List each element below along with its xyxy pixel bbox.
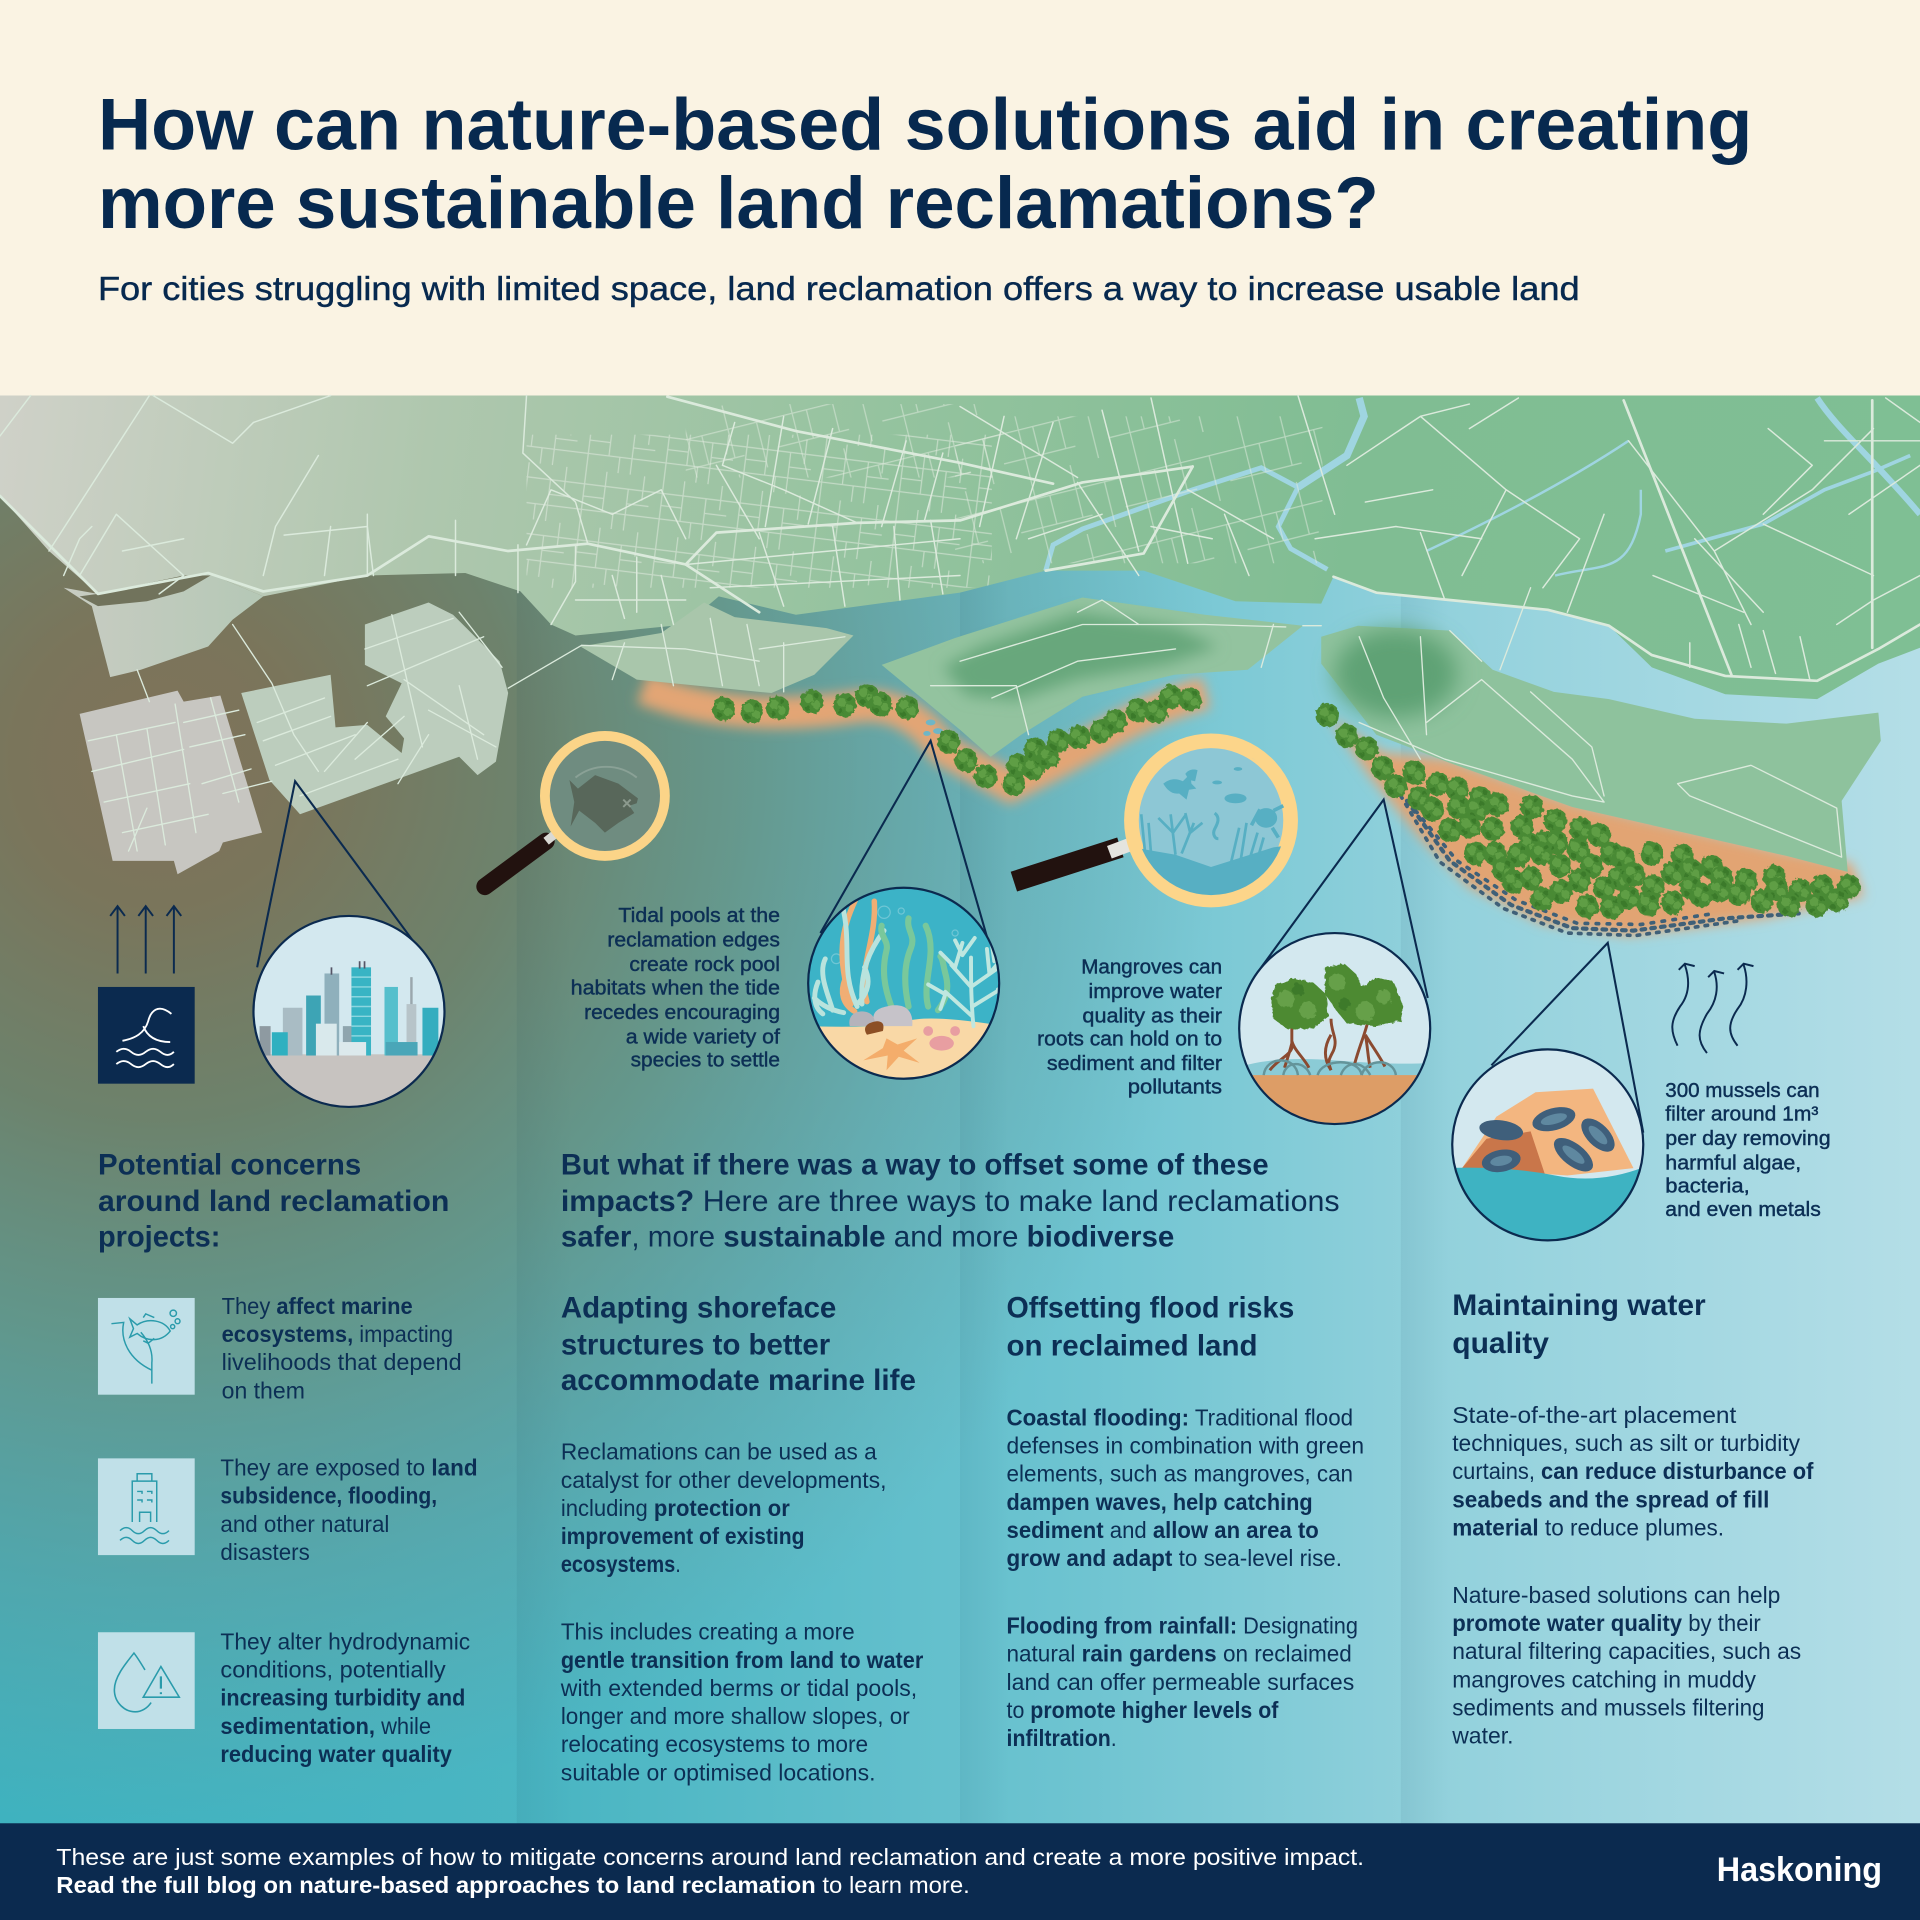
text: marine ecosystems: on them xyxy=(222,1377,305,1403)
logo: Haskoning: Haskoning xyxy=(1717,1851,1882,1889)
callout text: mussels: bacteria, xyxy=(1665,1176,1750,1198)
callout text: mangroves: sediment and filter xyxy=(1047,1053,1222,1075)
right island forest xyxy=(1335,629,1457,718)
text: catalyst xyxy=(561,1439,887,1577)
text: coastal flooding: elements, such as mangroves, can xyxy=(1007,1461,1353,1487)
text: rainfall flooding: infiltration. xyxy=(1007,1725,1117,1751)
heading: on reclaimed land xyxy=(1007,1330,1258,1363)
arrows: sea level rise xyxy=(110,906,181,973)
text: subsidence and flooding: They are exposed to land xyxy=(220,1455,478,1481)
text: catalyst: including protection or xyxy=(561,1495,790,1521)
circle: mussels xyxy=(1445,1049,1653,1249)
text: placement techniques: material to reduce plumes. xyxy=(1452,1515,1724,1541)
middle island forest xyxy=(943,612,1218,700)
text: placement techniques xyxy=(1452,1402,1814,1541)
callout text: tidal pools: species to settle xyxy=(631,1050,780,1072)
text: subsidence and flooding: disasters xyxy=(220,1539,310,1565)
heading: Offsetting flood risks xyxy=(1007,1292,1294,1325)
text: rainfall flooding: natural rain gardens on reclaimed xyxy=(1007,1641,1352,1667)
footer text xyxy=(56,1844,1364,1898)
text: catalyst: improvement of existing xyxy=(561,1523,804,1549)
icon: wave box xyxy=(98,987,195,1084)
heading: Maintaining water xyxy=(1452,1289,1706,1322)
text: natural filtering xyxy=(1451,1582,1801,1749)
text: gentle transition: This includes creating a more xyxy=(561,1619,855,1645)
callout text: mangroves: Mangroves can xyxy=(1081,956,1222,978)
callout text: mangroves: improve water xyxy=(1089,981,1222,1003)
heading: quality xyxy=(1452,1327,1549,1360)
text: natural filtering: Nature-based solutions can help xyxy=(1452,1582,1780,1608)
callout text: tidal pools: create rock pool xyxy=(629,954,780,976)
callout text: mussels: 300 mussels can xyxy=(1665,1080,1820,1102)
lagoon xyxy=(80,576,211,606)
heading: potential concerns xyxy=(98,1148,449,1254)
mangrove trees xyxy=(712,683,1861,920)
panel: water quality xyxy=(1451,1289,1814,1749)
circle: mangroves xyxy=(1237,933,1433,1136)
text: placement techniques: seabeds and the spread of fill xyxy=(1452,1486,1769,1512)
middle island xyxy=(882,598,1303,757)
heading: offset impacts: impacts? Here are three ways to make land reclamations xyxy=(561,1185,1340,1218)
text: coastal flooding: defenses in combination with green xyxy=(1007,1432,1364,1458)
text: marine ecosystems: ecosystems, impacting xyxy=(222,1321,453,1347)
text: natural filtering: water. xyxy=(1451,1723,1513,1749)
callout text: tidal pools xyxy=(571,905,780,1072)
arrows: filtered water xyxy=(1672,964,1753,1053)
callout text: tidal pools: habitats when the tide xyxy=(571,977,780,999)
text: catalyst: ecosystems. xyxy=(561,1551,681,1577)
circle: city skyline xyxy=(253,916,449,1116)
text: rainfall flooding xyxy=(1007,1612,1358,1751)
callout text: mussels: filter around 1m³ xyxy=(1665,1103,1819,1125)
port extension with lagoon xyxy=(64,573,263,677)
text: placement techniques: techniques, such as silt or turbidity xyxy=(1452,1430,1801,1456)
panel: flood risks xyxy=(1007,1292,1364,1751)
heading: potential concerns: Potential concerns xyxy=(98,1148,361,1181)
text: gentle transition: suitable or optimised locations. xyxy=(561,1759,876,1785)
sea gradient background xyxy=(0,396,1920,1828)
callout text: mussels: harmful algae, xyxy=(1665,1152,1801,1174)
text: marine ecosystems: They affect marine xyxy=(222,1293,413,1319)
heading xyxy=(1007,1292,1294,1363)
text: rainfall flooding: land can offer permeable surfaces xyxy=(1007,1669,1354,1695)
text: coastal flooding: sediment and allow an area to xyxy=(1007,1517,1319,1543)
heading: offset impacts xyxy=(561,1148,1340,1254)
text: subsidence and flooding: subsidence, flooding, xyxy=(220,1483,437,1509)
text: gentle transition: longer and more shallow slopes, or xyxy=(561,1703,910,1729)
text: placement techniques: curtains, can reduce disturbance of xyxy=(1452,1458,1814,1484)
sand strip: tidal edge xyxy=(643,688,1206,786)
heading: Adapting shoreface xyxy=(561,1292,836,1325)
text: natural filtering: natural filtering capacities, such as xyxy=(1452,1638,1801,1664)
tidal pools marker xyxy=(923,720,943,736)
title: more sustainable land reclamations? xyxy=(98,161,1379,244)
text: natural filtering: sediments and mussels filtering xyxy=(1452,1695,1764,1721)
text: catalyst: catalyst for other developments, xyxy=(561,1467,887,1493)
road network xyxy=(0,396,1920,857)
text: placement techniques: State-of-the-art placement xyxy=(1452,1402,1737,1428)
text: subsidence and flooding: and other natural xyxy=(220,1511,389,1537)
callout text: mangroves: quality as their xyxy=(1082,1005,1222,1027)
text: marine ecosystems xyxy=(222,1293,462,1403)
dense urban blocks xyxy=(527,404,1322,588)
rocks along shore xyxy=(1401,796,1799,936)
callout text: tidal pools: recedes encouraging xyxy=(584,1002,780,1024)
callout text: mussels: per day removing xyxy=(1665,1128,1831,1150)
callout text: mangroves xyxy=(1037,956,1222,1098)
subtitle: For cities struggling with limited space, land reclamation offers a way to increase usable land xyxy=(98,271,1580,308)
text: hydrodynamic conditions xyxy=(220,1628,470,1767)
text: hydrodynamic conditions: conditions, potentially xyxy=(220,1657,446,1683)
text: gentle transition xyxy=(560,1619,923,1785)
footer text: These are just some examples of how to mitigate concerns around land reclamation and create a more positive impact. xyxy=(56,1844,1364,1870)
footer xyxy=(0,1823,1920,1920)
callout text: mussels xyxy=(1665,1080,1831,1221)
text: rainfall flooding: Flooding from rainfall: Designating xyxy=(1007,1612,1358,1638)
text: hydrodynamic conditions: reducing water quality xyxy=(220,1741,452,1767)
heading: offset impacts: But what if there was a way to offset some of these xyxy=(561,1148,1269,1181)
callout text: tidal pools: reclamation edges xyxy=(607,930,780,952)
reclaimed block B and C xyxy=(241,602,508,814)
footer text: Read the full blog on nature-based approaches to land reclamation to learn more. xyxy=(56,1872,970,1898)
heading xyxy=(1452,1289,1706,1360)
callout text: mussels: and even metals xyxy=(1665,1199,1821,1221)
tidal peninsula xyxy=(580,602,853,693)
reclaimed block A xyxy=(80,691,262,874)
heading: accommodate marine life xyxy=(561,1364,916,1397)
title xyxy=(98,82,1752,244)
heading: offset impacts: safer, more sustainable and more biodiverse xyxy=(561,1221,1174,1254)
heading: potential concerns: projects: xyxy=(98,1221,220,1254)
text: coastal flooding xyxy=(1007,1404,1364,1571)
callout text: tidal pools: Tidal pools at the xyxy=(618,905,780,927)
heading: potential concerns: around land reclamation xyxy=(98,1185,449,1218)
text: hydrodynamic conditions: They alter hydrodynamic xyxy=(220,1628,470,1654)
icon: fish and seaweed xyxy=(98,1298,195,1395)
river tributaries xyxy=(1046,398,1920,576)
text: subsidence and flooding xyxy=(220,1455,478,1565)
text: rainfall flooding: to promote higher levels of xyxy=(1007,1697,1279,1723)
text: gentle transition: gentle transition from land to water xyxy=(561,1647,923,1673)
text: hydrodynamic conditions: sedimentation, while xyxy=(220,1713,431,1739)
callout text: tidal pools: a wide variety of xyxy=(626,1026,780,1048)
magnifier: dead fish xyxy=(485,736,665,887)
callout text: mangroves: pollutants xyxy=(1128,1076,1222,1098)
text: natural filtering: promote water quality by their xyxy=(1452,1610,1761,1636)
text: hydrodynamic conditions: increasing turbidity and xyxy=(220,1685,465,1711)
icon: water drop warning xyxy=(98,1632,195,1729)
heading xyxy=(561,1292,916,1397)
circle: tidal pool xyxy=(808,888,1013,1090)
text: marine ecosystems: livelihoods that depend xyxy=(222,1349,462,1375)
panel: potential concerns xyxy=(98,1148,478,1767)
text: catalyst: Reclamations can be used as a xyxy=(561,1439,877,1465)
mainland xyxy=(0,396,1920,699)
text: gentle transition: with extended berms or tidal pools, xyxy=(560,1675,917,1701)
panel: shoreface structures xyxy=(560,1292,923,1785)
map of the coastline xyxy=(0,396,1920,936)
cream header background xyxy=(0,0,1920,396)
title: How can nature-based solutions aid in creating xyxy=(98,82,1752,165)
magnifier: healthy sea xyxy=(1014,741,1292,906)
sand strip: mangrove shore xyxy=(1329,716,1864,936)
icon: flooded building xyxy=(98,1458,195,1555)
right island xyxy=(1321,626,1881,872)
callout lines xyxy=(257,741,1643,1133)
text: coastal flooding: Coastal flooding: Traditional flood xyxy=(1007,1404,1353,1430)
text: natural filtering: mangroves catching in muddy xyxy=(1452,1666,1757,1692)
text: coastal flooding: grow and adapt to sea-level rise. xyxy=(1007,1545,1342,1571)
callout text: mangroves: roots can hold on to xyxy=(1037,1029,1222,1051)
heading: structures to better xyxy=(561,1328,831,1361)
text: gentle transition: relocating ecosystems to more xyxy=(561,1731,868,1757)
text: coastal flooding: dampen waves, help catching xyxy=(1007,1489,1313,1515)
